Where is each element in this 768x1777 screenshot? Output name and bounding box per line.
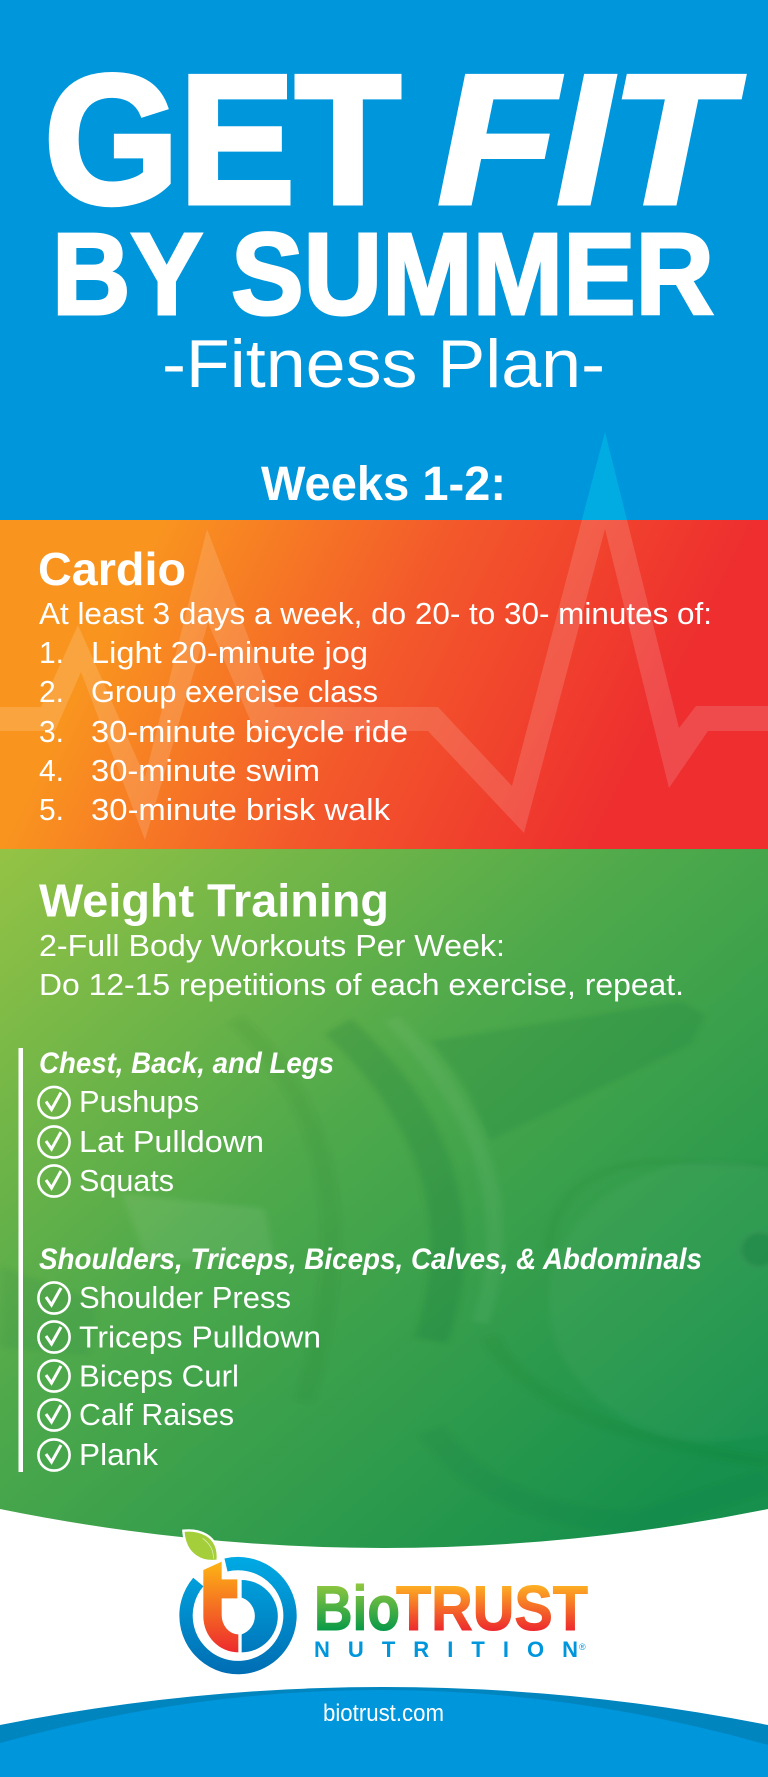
- checklist: chest back legs: Squats: [79, 1163, 174, 1198]
- heading: weeks: Weeks 1-2:: [261, 458, 506, 511]
- list: cardio options: 4.: [39, 753, 64, 788]
- subheading: chest back legs: Chest, Back, and Legs: [39, 1047, 334, 1080]
- list: cardio options: 5.: [39, 792, 64, 827]
- text: weight training intro: Do 12-15 repetitions of each exercise, repeat.: [39, 967, 684, 1002]
- logo wordmark: BioTRUST: [314, 1574, 588, 1644]
- list: cardio options: Light 20-minute jog: [91, 635, 368, 670]
- checklist: upper body and core: [38, 1280, 321, 1472]
- image: faint dumbbell: [126, 1011, 768, 1340]
- divider bar: [18, 1048, 23, 1472]
- list: cardio options: 1.: [39, 635, 64, 670]
- checklist: upper body and core: Calf Raises: [79, 1397, 234, 1432]
- text: cardio intro: At least 3 days a week, do 20- to 30- minutes of:: [39, 596, 712, 631]
- subheading: shoulders triceps biceps calves abdominals: Shoulders, Triceps, Biceps, Calves, & Abdominals: [39, 1243, 702, 1276]
- checklist: chest back legs: Pushups: [79, 1084, 199, 1119]
- decoration: heartbeat line: [0, 432, 768, 840]
- list: cardio options: [39, 635, 408, 827]
- text: weight training intro: [39, 928, 684, 1002]
- text: weight training intro: 2-Full Body Workouts Per Week:: [39, 928, 505, 963]
- panel: blue header background: [0, 0, 768, 521]
- list: cardio options: 30-minute bicycle ride: [91, 714, 408, 749]
- title: Get Fit: FIT: [438, 36, 744, 242]
- list: cardio options: 2.: [39, 674, 64, 709]
- subtitle: Fitness Plan: -Fitness Plan-: [162, 326, 605, 402]
- panel: weight training background: [0, 849, 768, 1548]
- logo wordmark: BioTRUST: Bio: [314, 1574, 400, 1644]
- panel: cardio background: [0, 520, 768, 849]
- list: cardio options: 3.: [39, 714, 64, 749]
- footer: dark blue curve: [0, 1687, 768, 1777]
- logo wordmark: Nutrition: NUTRITION: [314, 1637, 578, 1662]
- checklist: upper body and core: Shoulder Press: [79, 1280, 291, 1315]
- title: By Summer: BY SUMMER: [52, 209, 714, 339]
- title: Get Fit: GET: [44, 36, 401, 242]
- checklist: chest back legs: Lat Pulldown: [79, 1124, 264, 1159]
- title: Get Fit: [44, 36, 744, 242]
- list: cardio options: Group exercise class: [91, 674, 378, 709]
- logo wordmark: Nutrition: ®: [579, 1642, 586, 1652]
- footer: blue band: [0, 1690, 768, 1777]
- logo wordmark: BioTRUST: TRUST: [396, 1574, 588, 1644]
- checklist: upper body and core: Triceps Pulldown: [79, 1320, 321, 1354]
- logo mark: BioTrust b icon: [183, 1530, 290, 1668]
- footer url: biotrust.com: [323, 1700, 444, 1727]
- list: cardio options: 30-minute swim: [91, 753, 320, 788]
- list: cardio options: 30-minute brisk walk: [91, 792, 391, 827]
- checklist: chest back legs: [38, 1084, 264, 1198]
- heading: cardio: Cardio: [38, 543, 186, 595]
- checklist: upper body and core: Plank: [79, 1437, 159, 1472]
- heading: weight training: Weight Training: [39, 874, 389, 926]
- checklist: upper body and core: Biceps Curl: [79, 1358, 239, 1394]
